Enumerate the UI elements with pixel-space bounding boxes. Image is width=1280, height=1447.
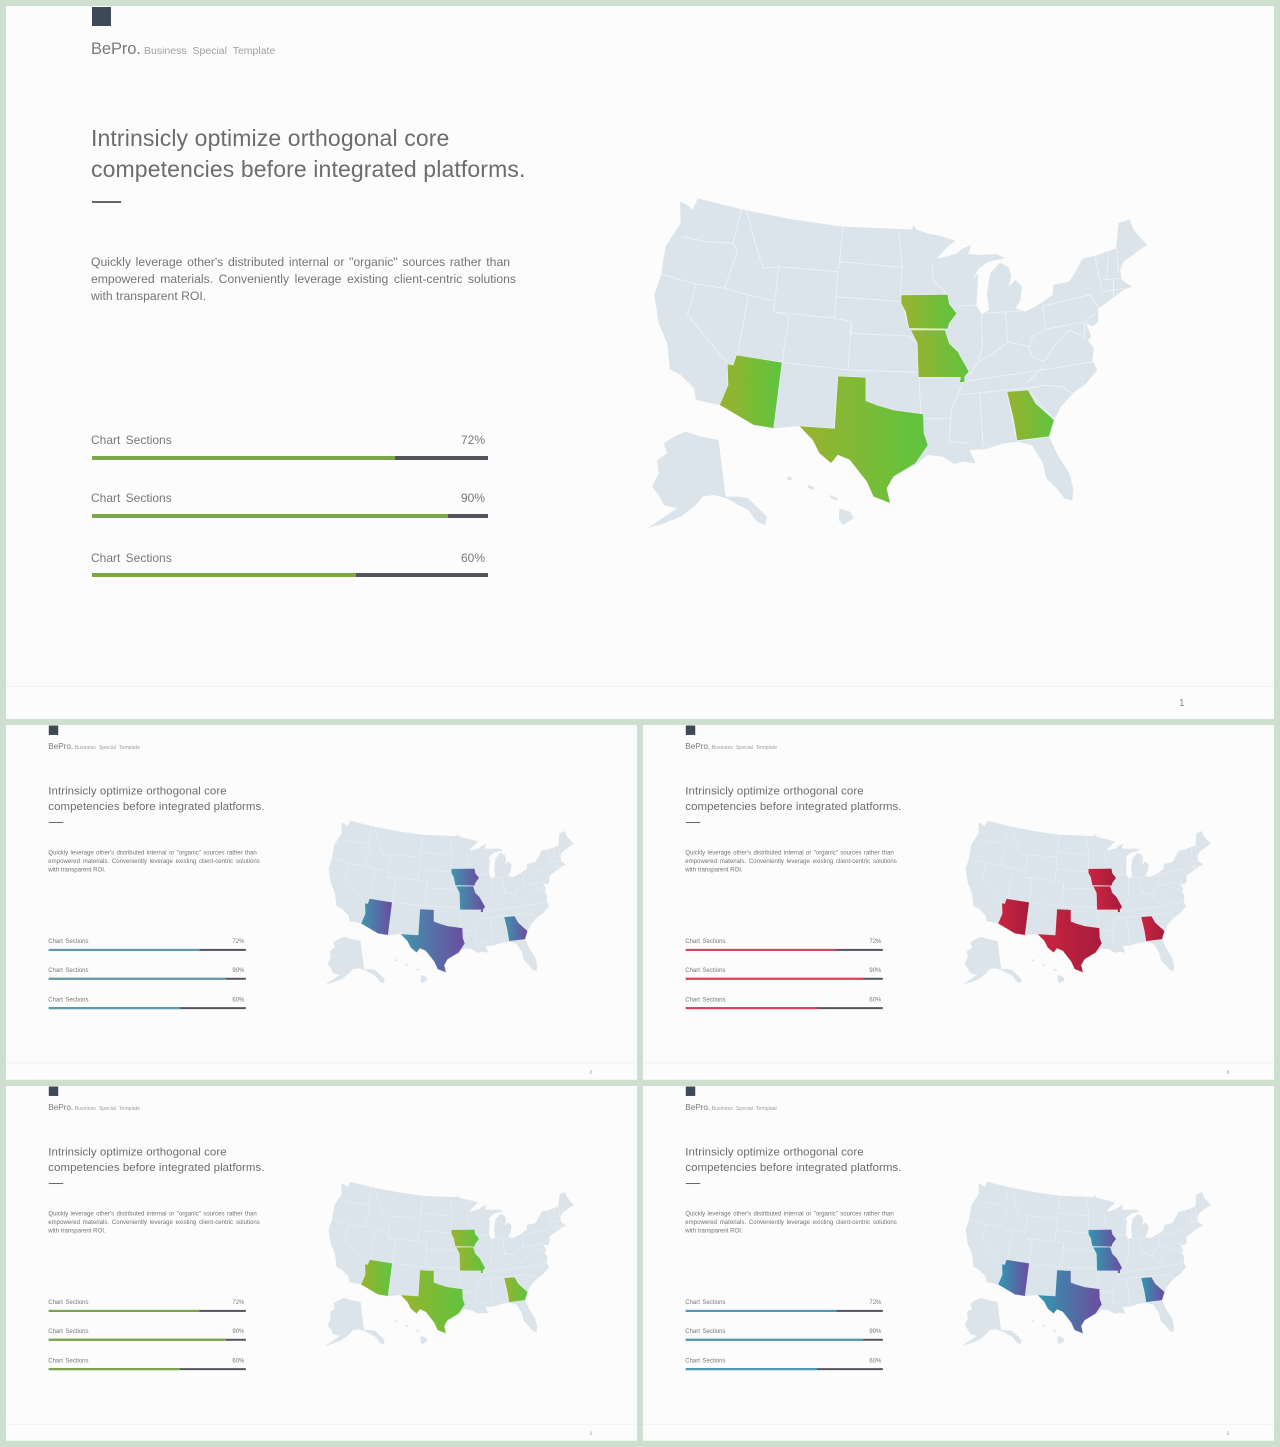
body text: Quickly leverage other's distributed internal or "organic" sources rather than (685, 1210, 894, 1217)
page number: 2 (590, 1069, 592, 1075)
heading: competencies before integrated platforms. (685, 800, 902, 813)
heading (685, 784, 902, 813)
footer line (6, 1423, 637, 1426)
heading: Intrinsicly optimize orthogonal core (48, 1145, 227, 1158)
footer line (643, 1062, 1274, 1065)
progress bar 2 (686, 1339, 883, 1341)
body text: empowered materials. Conveniently leverage existing client-centric solutions (91, 272, 516, 286)
panel: small slide 5 blue (643, 1086, 1274, 1441)
body text (685, 1210, 897, 1234)
body text: with transparent ROI. (91, 289, 206, 303)
chart label 3: Chart Sections (48, 996, 88, 1003)
footer line (643, 1423, 1274, 1426)
chart value 3: 60% (461, 551, 485, 565)
heading rule (92, 201, 121, 202)
chart value 1: 72% (461, 433, 485, 447)
heading: Intrinsicly optimize orthogonal core (685, 1145, 864, 1158)
progress bar 3 (686, 1368, 883, 1370)
chart label 3: Chart Sections (685, 996, 725, 1003)
progress bar 1 (92, 456, 488, 460)
progress bar 2 (49, 1339, 246, 1341)
chart label 1: Chart Sections (685, 937, 725, 944)
page number: 2 (1227, 1430, 1229, 1436)
chart label 2: Chart Sections (48, 1327, 88, 1334)
chart value 3: 60% (869, 996, 881, 1003)
body text: Quickly leverage other's distributed internal or "organic" sources rather than (685, 849, 894, 856)
chart label 2: Chart Sections (685, 1327, 725, 1334)
panel: small slide 2 teal (6, 725, 637, 1080)
body text (48, 849, 260, 873)
logo square (49, 725, 58, 735)
heading rule (686, 1182, 700, 1185)
chart label 2: Chart Sections (685, 966, 725, 973)
chart value 3: 60% (232, 1357, 244, 1364)
panel: small slide 4 green (6, 1086, 637, 1441)
brand tagline: Business Special Template (75, 1105, 140, 1111)
footer line (6, 1062, 637, 1065)
progress bar 1 (686, 949, 883, 951)
brand tagline: Business Special Template (712, 744, 777, 750)
chart value 3: 60% (869, 1357, 881, 1364)
chart label 3: Chart Sections (91, 551, 172, 565)
US map, red highlights (962, 820, 1211, 985)
progress bar 3 (49, 1368, 246, 1370)
brand name: BePro. (91, 40, 141, 58)
body text: Quickly leverage other's distributed internal or "organic" sources rather than (91, 255, 510, 269)
brand name: BePro. (48, 1103, 73, 1112)
heading: Intrinsicly optimize orthogonal core (48, 784, 227, 797)
body text: empowered materials. Conveniently leverage existing client-centric solutions (685, 1218, 897, 1225)
progress bar 3 (49, 1007, 246, 1009)
heading rule (686, 821, 700, 824)
chart label 1: Chart Sections (48, 1298, 88, 1305)
chart value 1: 72% (232, 937, 244, 944)
chart value 2: 90% (869, 966, 881, 973)
chart value 1: 72% (869, 937, 881, 944)
progress bar 1 (686, 1310, 883, 1312)
heading (48, 1145, 265, 1174)
heading rule (49, 821, 63, 824)
progress bar 2 (686, 978, 883, 980)
progress bar 1 (49, 949, 246, 951)
body text: Quickly leverage other's distributed internal or "organic" sources rather than (48, 1210, 257, 1217)
brand name: BePro. (48, 742, 73, 751)
heading (48, 784, 265, 813)
body text (48, 1210, 260, 1234)
brand tagline: Business Special Template (712, 1105, 777, 1111)
logo square (49, 1086, 58, 1096)
body text: with transparent ROI. (685, 1227, 743, 1234)
heading (685, 1145, 902, 1174)
logo square (686, 1086, 695, 1096)
chart label 1: Chart Sections (91, 433, 172, 447)
heading: competencies before integrated platforms. (91, 156, 526, 182)
heading: Intrinsicly optimize orthogonal core (91, 125, 449, 151)
body text: empowered materials. Conveniently leverage existing client-centric solutions (48, 857, 260, 864)
page number: 1 (590, 1430, 592, 1436)
brand tagline: Business Special Template (75, 744, 140, 750)
chart label 2: Chart Sections (48, 966, 88, 973)
body text (91, 255, 516, 303)
progress bar 2 (49, 978, 246, 980)
progress bar 3 (686, 1007, 883, 1009)
body text: empowered materials. Conveniently leverage existing client-centric solutions (685, 857, 897, 864)
chart value 2: 90% (869, 1327, 881, 1334)
heading: Intrinsicly optimize orthogonal core (685, 784, 864, 797)
chart value 2: 90% (461, 491, 485, 505)
heading: competencies before integrated platforms. (685, 1161, 902, 1174)
page number: 1 (1179, 698, 1185, 709)
logo square (686, 725, 695, 735)
heading: competencies before integrated platforms. (48, 800, 265, 813)
chart label 2: Chart Sections (91, 491, 172, 505)
US map, green highlights (326, 1182, 574, 1346)
chart value 1: 72% (869, 1298, 881, 1305)
progress bar 3 (92, 573, 488, 577)
US map, green highlights (648, 198, 1147, 528)
brand name: BePro. (685, 742, 710, 751)
progress bar 1 (49, 1310, 246, 1312)
chart label 3: Chart Sections (48, 1357, 88, 1364)
footer line (6, 686, 1274, 687)
panel: large slide 1 (6, 6, 1274, 719)
logo square (92, 7, 111, 26)
body text: empowered materials. Conveniently leverage existing client-centric solutions (48, 1218, 260, 1225)
progress bar 2 (92, 514, 488, 518)
chart label 1: Chart Sections (48, 937, 88, 944)
body text: with transparent ROI. (48, 1227, 106, 1234)
body text (685, 849, 897, 873)
chart label 1: Chart Sections (685, 1298, 725, 1305)
panel: small slide 3 red (643, 725, 1274, 1080)
chart value 3: 60% (232, 996, 244, 1003)
body text: with transparent ROI. (48, 866, 106, 873)
heading: competencies before integrated platforms. (48, 1161, 265, 1174)
chart value 1: 72% (232, 1298, 244, 1305)
heading rule (49, 1182, 63, 1185)
brand tagline: Business Special Template (144, 45, 275, 57)
chart value 2: 90% (232, 966, 244, 973)
body text: Quickly leverage other's distributed internal or "organic" sources rather than (48, 849, 257, 856)
brand name: BePro. (685, 1103, 710, 1112)
chart value 2: 90% (232, 1327, 244, 1334)
page number: 3 (1227, 1069, 1229, 1075)
US map, blue-purple highlights (962, 1182, 1211, 1346)
chart label 3: Chart Sections (685, 1357, 725, 1364)
heading (91, 125, 526, 182)
US map, teal-purple highlights (326, 820, 574, 985)
body text: with transparent ROI. (685, 866, 743, 873)
